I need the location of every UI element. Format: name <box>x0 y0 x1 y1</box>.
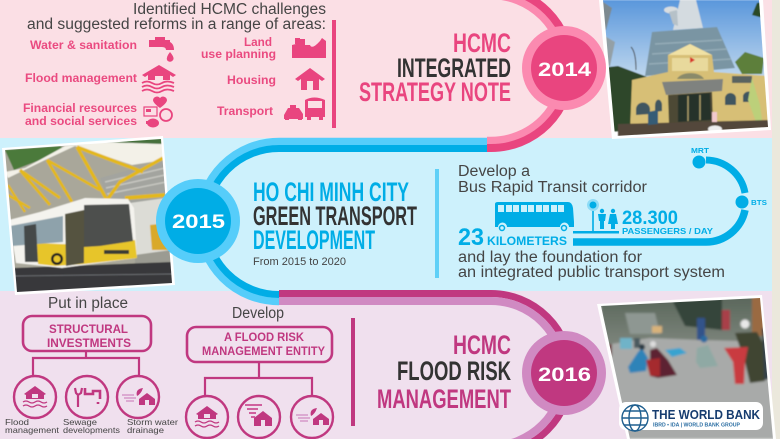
reform area labels: Water & sanitation <box>30 40 137 52</box>
icon: wind and house circle <box>238 396 280 438</box>
reform area labels <box>23 37 276 128</box>
icon: taxi and bus <box>284 98 325 120</box>
divider: 2014 <box>332 20 336 128</box>
title: Ho Chi Minh City Green Transport Development <box>253 177 417 268</box>
timeline ribbon: 2016 magenta arc <box>279 294 571 439</box>
year badge: 2016: 2016 <box>538 365 591 386</box>
title: HCMC Flood Risk Management: FLOOD RISK <box>397 356 511 386</box>
logo: The World Bank <box>619 402 763 431</box>
icon: storm water circle <box>291 396 333 438</box>
divider: 2016 <box>351 318 355 426</box>
text: integrated public transport foundation <box>458 249 725 281</box>
connector tree: structural investments <box>33 352 139 375</box>
year badge: 2015: 2015 <box>172 212 226 233</box>
heading: Develop: Develop <box>232 305 284 322</box>
route diagram: BRT line with MRT and BTS stops <box>573 146 767 242</box>
box: structural investments <box>23 316 151 351</box>
labels: structural investment items: Storm water <box>127 417 178 427</box>
reform area labels: Financial resources <box>23 103 137 115</box>
divider: 2015 <box>435 169 439 278</box>
reform area labels: Housing <box>227 75 276 87</box>
timeline ribbon: 2014 pink arc <box>487 0 571 148</box>
text: develop BRT corridor: Develop a <box>458 163 530 180</box>
box: structural investments: STRUCTURAL <box>49 324 128 336</box>
title: Ho Chi Minh City Green Transport Development: HO CHI MINH CITY <box>253 177 409 207</box>
year badge: 2014 <box>522 26 606 110</box>
title: HCMC Flood Risk Management: MANAGEMENT <box>377 384 511 414</box>
text: develop BRT corridor: Bus Rapid Transit corridor <box>458 179 647 196</box>
box: flood risk management entity: MANAGEMENT ENTITY <box>202 346 325 358</box>
title: Ho Chi Minh City Green Transport Development: GREEN TRANSPORT <box>253 201 417 231</box>
title: Ho Chi Minh City Green Transport Development: From 2015 to 2020 <box>253 256 346 268</box>
icon: land use <box>292 38 326 58</box>
logo: The World Bank: THE WORLD BANK <box>652 407 761 422</box>
year badge: 2014: 2014 <box>538 60 592 81</box>
icon: sewage circle <box>66 376 108 418</box>
text: integrated public transport foundation: and lay the foundation for <box>458 249 642 266</box>
icon: flood circle <box>186 396 228 438</box>
labels: structural investment items: drainage <box>127 425 164 435</box>
title: Ho Chi Minh City Green Transport Development: DEVELOPMENT <box>253 225 375 255</box>
panel: 2014 background <box>0 0 772 138</box>
logo: The World Bank: IBRD • IDA | WORLD BANK GROUP <box>653 422 740 428</box>
title: HCMC Integrated Strategy Note: HCMC <box>453 28 511 58</box>
heading: Put in place: Put in place <box>48 295 128 312</box>
photo: flooded street with motorbikes <box>597 295 776 439</box>
reform area labels: use planning <box>201 49 276 61</box>
stat: 28.300 passengers per day <box>622 208 713 236</box>
labels: structural investment items: management <box>5 425 60 435</box>
icon: flood management circle <box>14 376 56 418</box>
stat: 28.300 passengers per day: PASSENGERS / DAY <box>622 226 713 236</box>
panel: 2016 background <box>0 291 772 439</box>
text: integrated public transport foundation: an integrated public transport system <box>458 264 725 281</box>
labels: structural investment items: Sewage <box>63 417 97 427</box>
heading: 2014 intro text: and suggested reforms in a range of areas: <box>27 16 326 33</box>
text: develop BRT corridor <box>458 163 647 196</box>
title: HCMC Flood Risk Management <box>377 330 511 414</box>
stat: 23 kilometers: 23 <box>458 224 484 251</box>
stat: 23 kilometers <box>458 224 567 251</box>
heading: 2014 intro text <box>27 1 326 33</box>
year badge: 2016 <box>522 331 606 415</box>
heading: 2014 intro text: Identified HCMC challenges <box>133 1 326 18</box>
year badge: 2015 <box>156 179 240 263</box>
icon: flooded house <box>142 65 176 92</box>
icon: storm water drainage circle <box>117 376 159 418</box>
box: flood risk management entity: A FLOOD RISK <box>224 332 305 344</box>
stat: 28.300 passengers per day: 28.300 <box>622 208 678 229</box>
box: flood risk management entity <box>187 327 332 362</box>
reform area labels: Land <box>244 37 272 49</box>
route diagram: BRT line with MRT and BTS stops: BTS <box>751 198 767 207</box>
title: HCMC Integrated Strategy Note <box>359 28 511 107</box>
connector tree: flood risk entity <box>205 363 312 395</box>
icon: water tap <box>149 37 174 62</box>
title: HCMC Flood Risk Management: HCMC <box>453 330 511 360</box>
title: HCMC Integrated Strategy Note: STRATEGY NOTE <box>359 77 511 107</box>
panel: 2015 background <box>0 138 772 291</box>
stat: 23 kilometers: KILOMETERS <box>487 236 567 248</box>
reform area labels: Flood management <box>25 73 137 85</box>
labels: structural investment items: developments <box>63 425 120 435</box>
icon: bus stop and passengers <box>573 199 619 234</box>
photo: BRT bus at station <box>0 136 178 296</box>
icon: bus <box>495 202 574 230</box>
reform area labels: and social services <box>25 116 137 128</box>
photo: Bitexco tower and colonial building <box>598 0 773 140</box>
box: structural investments: INVESTMENTS <box>47 338 131 350</box>
icon: house <box>295 68 325 90</box>
title: HCMC Integrated Strategy Note: INTEGRATED <box>397 53 511 83</box>
route diagram: BRT line with MRT and BTS stops: MRT <box>691 146 709 155</box>
labels: structural investment items <box>5 417 178 435</box>
icon: financial and social services <box>144 97 172 128</box>
labels: structural investment items: Flood <box>5 417 29 427</box>
reform area labels: Transport <box>217 106 273 118</box>
timeline ribbon: 2015 blue band <box>199 142 487 302</box>
